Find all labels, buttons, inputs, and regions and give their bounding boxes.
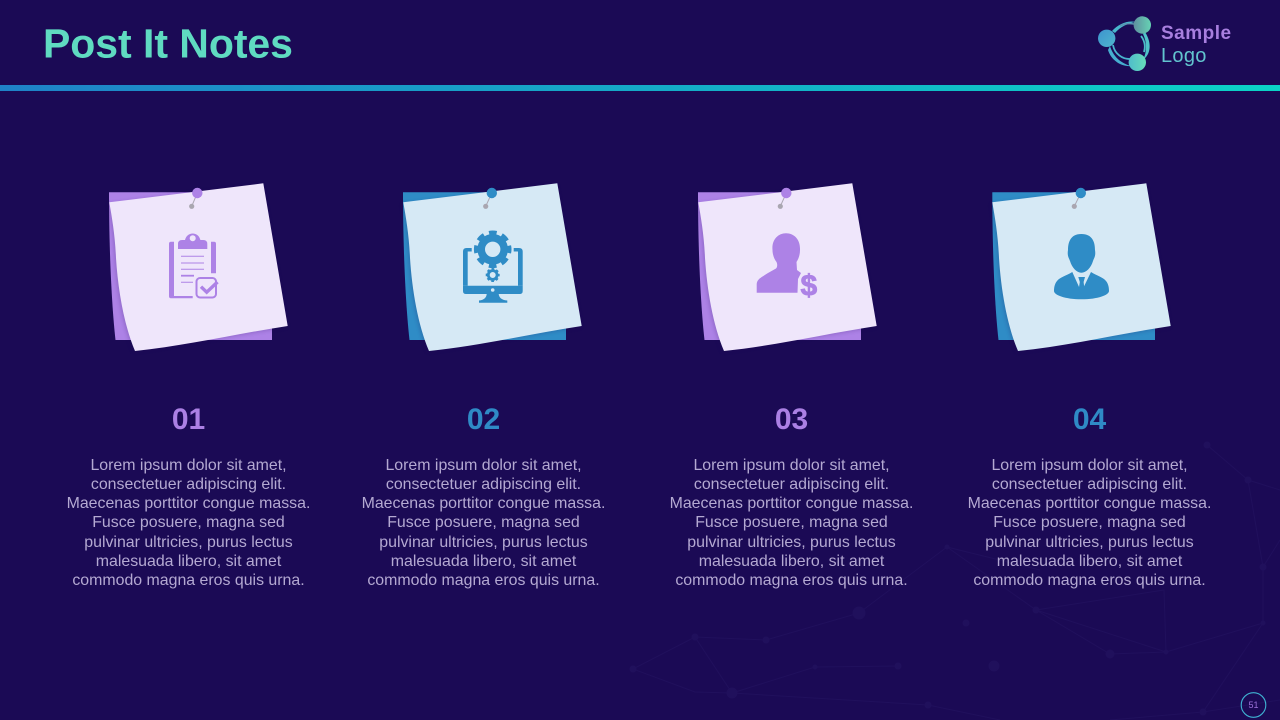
front sheet <box>697 183 877 352</box>
icon: person with dollar sign: $ <box>800 270 817 302</box>
text block 3 <box>670 457 913 589</box>
logo text <box>1161 23 1232 67</box>
text block 2: commodo magna eros quis urna. <box>367 572 600 589</box>
back sheet <box>698 192 861 340</box>
text block 1: commodo magna eros quis urna. <box>72 572 305 589</box>
text block 4: Lorem ipsum dolor sit amet, <box>991 457 1188 474</box>
text block 4 <box>968 457 1211 589</box>
post-it note 3: person with dollar <box>697 183 877 352</box>
background network pattern <box>630 442 1280 720</box>
pin <box>483 188 497 209</box>
back sheet <box>403 192 566 340</box>
text block 3: pulvinar ultricies, purus lectus <box>687 534 896 551</box>
text block 3: Fusce posuere, magna sed <box>695 514 888 531</box>
number 01: 01 <box>172 403 205 436</box>
text block 1: Fusce posuere, magna sed <box>92 514 285 531</box>
text block 1: Maecenas porttitor congue massa. <box>67 495 310 512</box>
text block 1: malesuada libero, sit amet <box>96 553 281 570</box>
logo text: Sample <box>1161 23 1232 44</box>
back sheet <box>109 192 272 340</box>
text block 2: malesuada libero, sit amet <box>391 553 576 570</box>
text block 3: consectetuer adipiscing elit. <box>694 476 889 493</box>
pin <box>778 188 792 209</box>
text block 2: Maecenas porttitor congue massa. <box>362 495 605 512</box>
icon: business person <box>1054 234 1109 299</box>
text block 1: consectetuer adipiscing elit. <box>91 476 286 493</box>
title: Post It Notes <box>43 20 293 66</box>
number 03: 03 <box>775 403 808 436</box>
text block 2: consectetuer adipiscing elit. <box>386 476 581 493</box>
front sheet <box>108 183 288 352</box>
logo mark: three linked circles <box>1098 16 1151 71</box>
logo <box>1098 16 1232 71</box>
text block 4: pulvinar ultricies, purus lectus <box>985 534 1194 551</box>
icon: monitor with gears <box>463 233 523 303</box>
text block 3: Maecenas porttitor congue massa. <box>670 495 913 512</box>
post-it note 2: monitor gears <box>402 183 582 352</box>
text block 2: Lorem ipsum dolor sit amet, <box>385 457 582 474</box>
back sheet <box>992 192 1155 340</box>
logo text: Logo <box>1161 45 1207 67</box>
post-it note 1: clipboard <box>108 183 288 352</box>
text block 1 <box>67 457 310 589</box>
pin <box>189 188 202 209</box>
text block 1: pulvinar ultricies, purus lectus <box>84 534 293 551</box>
icon: person with dollar sign <box>757 233 817 302</box>
text block 4: malesuada libero, sit amet <box>997 553 1182 570</box>
text block 2 <box>362 457 605 589</box>
front sheet <box>991 183 1171 352</box>
text block 4: consectetuer adipiscing elit. <box>992 476 1187 493</box>
pin <box>1072 188 1086 209</box>
text block 4: commodo magna eros quis urna. <box>973 572 1206 589</box>
text block 2: Fusce posuere, magna sed <box>387 514 580 531</box>
post-it note 4: business person <box>991 183 1171 352</box>
text block 3: commodo magna eros quis urna. <box>675 572 908 589</box>
number 04: 04 <box>1073 403 1106 436</box>
page number badge: 51 <box>1248 700 1259 710</box>
text block 4: Maecenas porttitor congue massa. <box>968 495 1211 512</box>
text block 3: Lorem ipsum dolor sit amet, <box>693 457 890 474</box>
number 02: 02 <box>467 403 500 436</box>
text block 3: malesuada libero, sit amet <box>699 553 884 570</box>
text block 1: Lorem ipsum dolor sit amet, <box>90 457 287 474</box>
icon: clipboard with check <box>169 234 218 298</box>
text block 2: pulvinar ultricies, purus lectus <box>379 534 588 551</box>
page number badge <box>1241 693 1266 717</box>
text block 4: Fusce posuere, magna sed <box>993 514 1186 531</box>
front sheet <box>402 183 582 352</box>
header divider bar <box>0 85 1280 91</box>
